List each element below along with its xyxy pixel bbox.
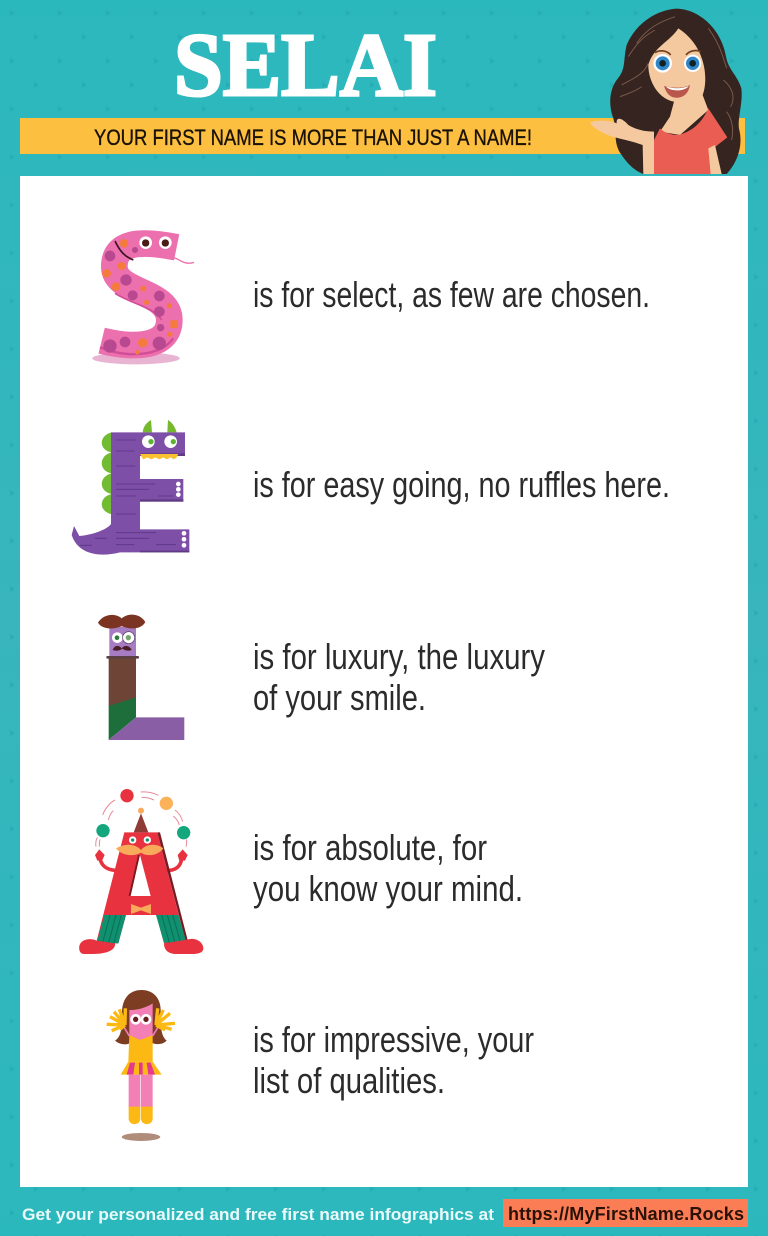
eyes bbox=[653, 54, 672, 73]
row 5: letter I cheerleader bbox=[107, 990, 175, 1141]
row 2: letter E monster bbox=[72, 420, 189, 555]
row 4 text: is for absolute, for bbox=[253, 827, 487, 868]
row 4 text bbox=[253, 827, 523, 909]
row 1: letter S monster bbox=[92, 236, 194, 364]
white panel bbox=[20, 176, 748, 1187]
illustration: woman presenter bbox=[590, 9, 742, 174]
footer link badge: https://MyFirstName.Rocks bbox=[508, 1204, 744, 1224]
footer text: Get your personalized and free first name infographics at bbox=[22, 1205, 494, 1224]
footer link badge bbox=[503, 1199, 748, 1227]
row 2 text: is for easy going, no ruffles here. bbox=[253, 464, 670, 505]
row 5 text bbox=[253, 1019, 534, 1101]
banner bbox=[20, 118, 745, 154]
row 4 text: you know your mind. bbox=[253, 868, 523, 909]
row 4: letter A juggling clown bbox=[79, 789, 203, 954]
row 3 text: is for luxury, the luxury bbox=[253, 636, 545, 677]
row 1 text: is for select, as few are chosen. bbox=[253, 274, 650, 315]
mouth bbox=[664, 85, 690, 98]
face bbox=[648, 28, 708, 135]
row 5 text: is for impressive, your bbox=[253, 1019, 534, 1060]
banner text: YOUR FIRST NAME IS MORE THAN JUST A NAME! bbox=[94, 125, 532, 150]
row 5 text: list of qualities. bbox=[253, 1060, 445, 1101]
title: SELAI bbox=[174, 16, 437, 115]
row 3 text: of your smile. bbox=[253, 677, 426, 718]
row 3: letter L gentleman bbox=[98, 615, 184, 740]
arm and hand bbox=[590, 119, 654, 174]
shirt bbox=[654, 108, 727, 174]
row 3 text bbox=[253, 636, 545, 718]
